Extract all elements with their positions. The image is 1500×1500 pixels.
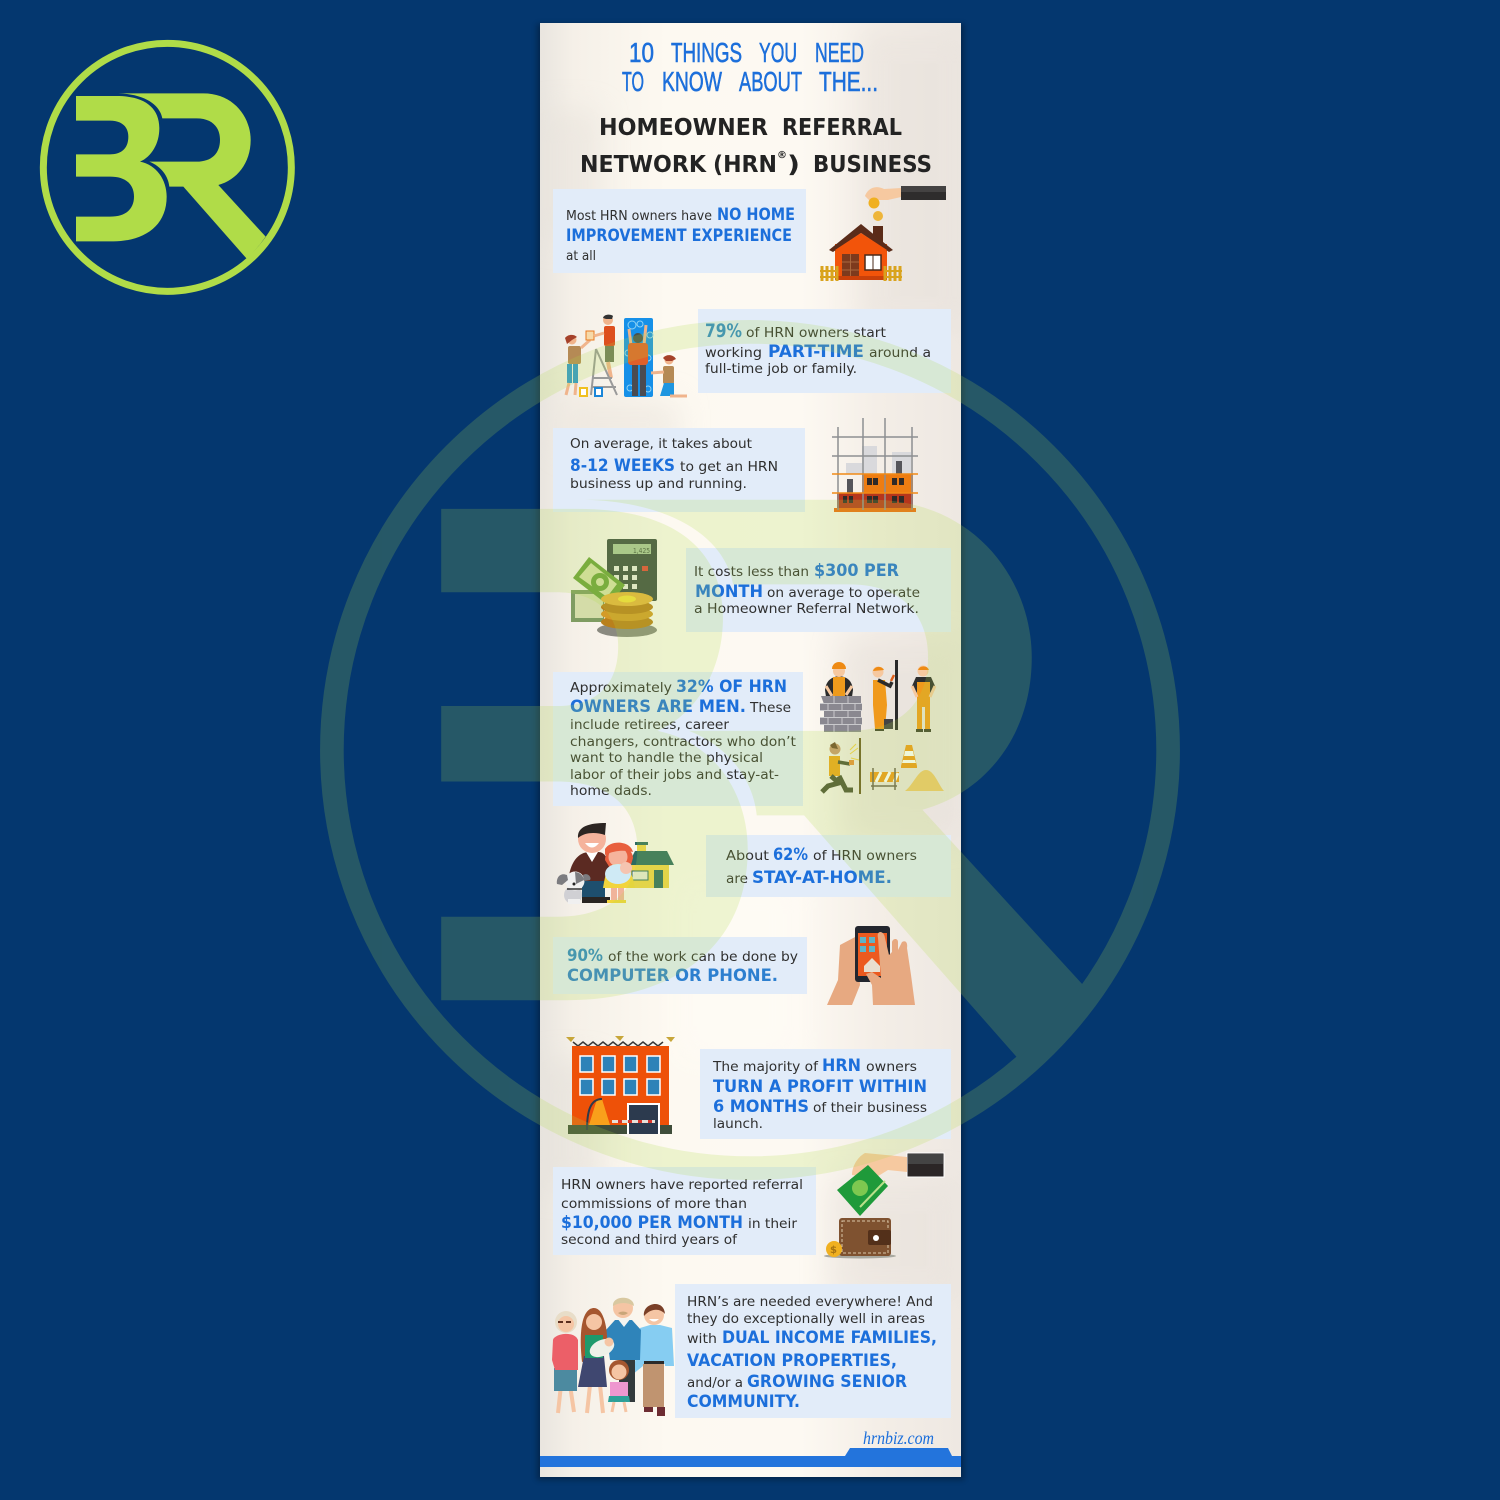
panel: fact 5 men: labor of their jobs and stay-at- xyxy=(570,767,779,783)
sand pile xyxy=(905,770,944,791)
mom and baby xyxy=(578,1308,617,1413)
panel: fact 5 men: include retirees, career xyxy=(570,717,729,733)
panel: fact 1 no experience: Most HRN owners have xyxy=(566,208,712,224)
panel: fact 9 commissions: commissions of more than xyxy=(561,1196,747,1212)
panel: fact 2 part-time: working xyxy=(705,345,762,361)
heading: homeowner referral network: BUSINESS xyxy=(813,152,932,178)
panel: fact 1 no experience: at all xyxy=(566,248,596,264)
panel: fact 2 part-time: around a xyxy=(869,345,931,361)
panel: fact 5 men: changers, contractors who don’t xyxy=(570,734,796,750)
panel: fact 6 stay at home: 62% xyxy=(773,845,808,865)
panel: fact 8 profit: TURN A PROFIT WITHIN xyxy=(713,1077,927,1097)
panel: fact 4 cost xyxy=(686,548,951,632)
girl xyxy=(608,1360,630,1412)
panel: fact 6 stay at home: of HRN owners xyxy=(813,848,917,864)
panel: fact 8 profit: The majority of xyxy=(712,1059,819,1075)
panel: fact 4 cost: a Homeowner Referral Network. xyxy=(694,601,919,617)
welder xyxy=(822,738,861,794)
woman holding frame xyxy=(565,335,590,395)
heading: homeowner referral network: ) xyxy=(787,152,800,178)
panel: fact 10 everywhere: VACATION PROPERTIES, xyxy=(687,1351,897,1371)
panel: fact 8 profit: 6 MONTHS xyxy=(713,1097,809,1117)
icon: building under construction xyxy=(832,418,918,512)
panel: fact 4 cost: $300 PER xyxy=(814,561,899,581)
worker with bricks xyxy=(820,662,862,732)
icon: family with house and dog xyxy=(557,823,674,904)
mother and baby xyxy=(603,843,635,903)
panel: fact 5 men: 32% OF HRN xyxy=(676,677,787,697)
panel: fact 10 everywhere: they do exceptionally well in areas xyxy=(687,1311,925,1327)
panel: fact 7 computer or phone: 90% xyxy=(567,946,603,966)
heading: homeowner referral network: NETWORK xyxy=(580,152,707,178)
panel: fact 8 profit: owners xyxy=(866,1059,917,1075)
heading: homeowner referral network: ® xyxy=(777,150,787,161)
panel: fact 9 commissions: second and third years of xyxy=(561,1232,738,1248)
icon: people renovating xyxy=(565,315,687,397)
father xyxy=(568,823,610,903)
icon: construction workers xyxy=(820,660,944,794)
worker with pole xyxy=(872,660,898,731)
dad xyxy=(632,1304,674,1416)
title: 10 things: ABOUT xyxy=(739,66,802,97)
panel: fact 4 cost: It costs less than xyxy=(694,564,809,580)
footer: website and bar: hrnbiz.com xyxy=(863,1428,934,1448)
panel: fact 6 stay at home xyxy=(706,835,951,897)
dog xyxy=(557,872,591,904)
panel: fact 10 everywhere: DUAL INCOME FAMILIES, xyxy=(722,1328,937,1348)
icon: calculator money coins: 1,425 xyxy=(633,547,650,555)
panel: infographic sheet xyxy=(537,23,970,1480)
watermark: large 3R logo xyxy=(332,332,1168,1168)
panel: fact 8 profit: launch. xyxy=(713,1116,763,1132)
panel: fact 5 men xyxy=(553,672,803,806)
panel: fact 9 commissions xyxy=(553,1167,816,1255)
panel: fact 2 part-time: PART-TIME xyxy=(768,342,864,362)
panel: fact 5 men: want to handle the physical xyxy=(570,750,763,766)
panel: fact 8 profit: HRN xyxy=(822,1056,861,1076)
panel: fact 3 weeks: to get an HRN xyxy=(680,459,778,475)
icon: red building xyxy=(566,1036,675,1134)
panel: fact 5 men: These xyxy=(749,700,791,716)
panel: fact 7 computer or phone xyxy=(553,937,807,994)
panel: fact 5 men: home dads. xyxy=(570,783,652,799)
panel: fact 5 men: Approximately xyxy=(570,680,672,696)
panel: fact 10 everywhere: HRN’s are needed everywhere! And xyxy=(687,1294,933,1310)
icon: calculator money coins xyxy=(571,539,657,637)
icon: house with coins xyxy=(820,186,946,281)
panel: fact 8 profit xyxy=(700,1049,951,1139)
man on ladder xyxy=(594,315,615,378)
panel: fact 2 part-time: of HRN owners start xyxy=(746,325,886,341)
panel: fact 1 no experience xyxy=(553,189,806,273)
panel: fact 7 computer or phone: COMPUTER OR PHONE. xyxy=(567,966,778,986)
icon: money into wallet: $ xyxy=(830,1245,837,1256)
kneeling woman xyxy=(651,355,687,396)
panel: fact 9 commissions: $10,000 PER MONTH xyxy=(561,1213,743,1233)
grandma xyxy=(552,1311,578,1413)
man at wall xyxy=(628,325,648,396)
panel: fact 10 everywhere: COMMUNITY. xyxy=(687,1392,800,1412)
panel: fact 3 weeks: 8-12 WEEKS xyxy=(570,456,675,476)
title: 10 things: NEED xyxy=(815,37,864,68)
heading: homeowner referral network: (HRN xyxy=(713,152,777,178)
title: 10 things: THE... xyxy=(819,66,878,97)
icon: hands holding phone xyxy=(827,926,915,1005)
panel: fact 3 weeks xyxy=(553,428,805,512)
panel: fact 6 stay at home: are xyxy=(726,871,748,887)
title: 10 things: TO xyxy=(622,66,644,97)
panel: fact 9 commissions: in their xyxy=(748,1216,797,1232)
logo: 3R circle top left xyxy=(43,43,291,291)
panel: fact 6 stay at home: About xyxy=(726,848,769,864)
panel: fact 5 men: OWNERS ARE MEN. xyxy=(570,697,746,717)
traffic cone xyxy=(901,745,917,768)
panel: fact 2 part-time: full-time job or family. xyxy=(705,361,857,377)
heading: homeowner referral network xyxy=(580,115,932,178)
heading: homeowner referral network: HOMEOWNER xyxy=(599,115,768,141)
panel: fact 8 profit: of their business xyxy=(813,1100,927,1116)
footer: website and bar xyxy=(540,1428,961,1467)
panel: fact 3 weeks: business up and running. xyxy=(570,476,747,492)
icon: money into wallet xyxy=(824,1153,944,1258)
barrier xyxy=(870,768,899,790)
panel: fact 4 cost: on average to operate xyxy=(767,585,920,601)
panel: fact 10 everywhere xyxy=(675,1284,951,1418)
panel: fact 4 cost: MONTH xyxy=(695,582,763,602)
standing worker xyxy=(912,666,935,732)
panel: fact 10 everywhere: with xyxy=(687,1331,717,1347)
title: 10 things: KNOW xyxy=(662,66,722,97)
panel: fact 9 commissions: HRN owners have reported referral xyxy=(561,1177,803,1193)
title: 10 things: 10 xyxy=(629,37,654,68)
title: 10 things xyxy=(622,37,878,97)
title: 10 things: YOU xyxy=(759,37,797,68)
panel: fact 10 everywhere: GROWING SENIOR xyxy=(747,1372,907,1392)
panel: fact 10 everywhere: and/or a xyxy=(687,1375,743,1391)
panel: fact 7 computer or phone: of the work can be done by xyxy=(608,949,798,965)
panel: fact 1 no experience: IMPROVEMENT EXPERIENCE xyxy=(566,226,792,246)
panel: fact 6 stay at home: STAY-AT-HOME. xyxy=(752,868,892,888)
grandpa xyxy=(606,1298,641,1402)
icon: extended family xyxy=(552,1298,674,1416)
panel: fact 3 weeks: On average, it takes about xyxy=(570,436,752,452)
heading: homeowner referral network: REFERRAL xyxy=(782,115,902,141)
panel: fact 2 part-time: 79% xyxy=(705,320,742,342)
panel: fact 2 part-time xyxy=(698,309,951,393)
title: 10 things: THINGS xyxy=(671,37,742,68)
panel: fact 1 no experience: NO HOME xyxy=(717,205,795,225)
